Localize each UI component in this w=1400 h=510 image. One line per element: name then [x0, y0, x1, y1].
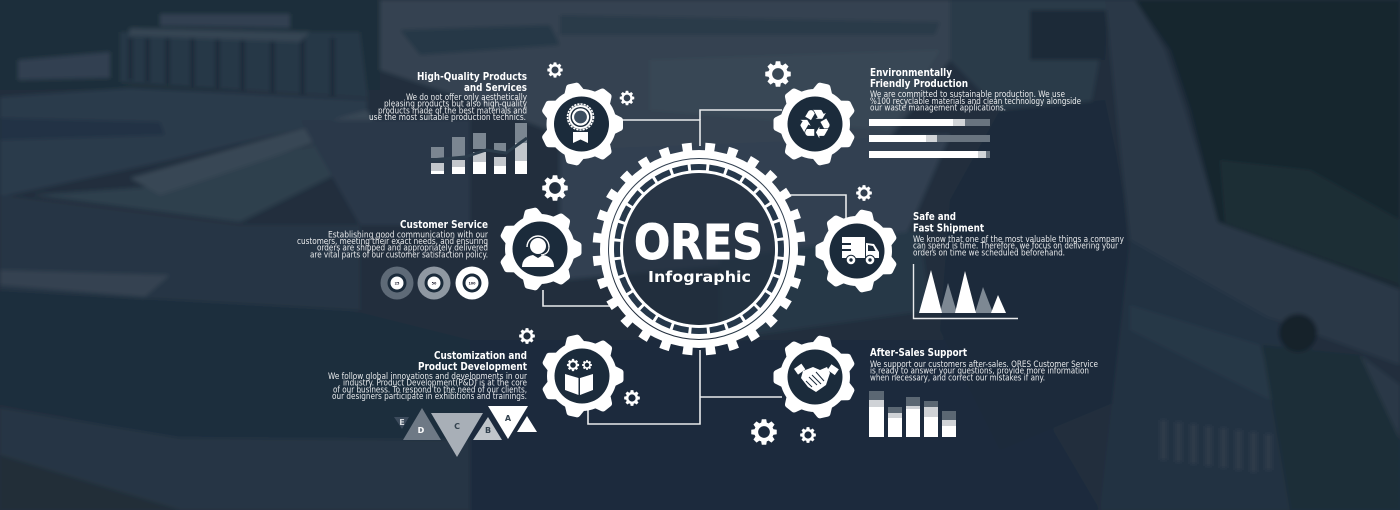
bar chart: quality [431, 123, 527, 174]
gear: recycling [774, 81, 857, 167]
icon: delivery truck [836, 237, 879, 265]
trend line [431, 138, 527, 160]
gear: after-sales handshake [774, 334, 857, 420]
icon: book with gears [565, 359, 593, 395]
body text: We know that one of the most valuable things a company [913, 234, 1124, 244]
triangle chart: A to E: A [505, 414, 512, 423]
heading: Fast Shipment [913, 222, 984, 234]
body text [328, 371, 527, 401]
heading [870, 67, 968, 90]
donut charts: 25, 50, 100 [380, 266, 488, 300]
body text: We support our customers after-sales. ORES Customer Service [870, 359, 1098, 369]
connector lines [543, 110, 846, 424]
icon: recycle symbol: ♻ [797, 102, 833, 148]
mountain chart: shipment [914, 264, 1018, 318]
gear: quality award [539, 81, 623, 167]
body text: pleasing products but also high-quality [384, 99, 527, 109]
body text [297, 230, 488, 259]
body text: We follow global innovations and developments in our [328, 371, 527, 381]
gear: shipment truck [816, 208, 899, 294]
body text: Establishing good communication with our [328, 230, 488, 240]
body text: of our business. To respond to the need of our clients, [333, 384, 527, 394]
heading: After-Sales Support [870, 347, 967, 359]
text block: environmentally friendly [870, 67, 1081, 112]
subtitle: Infographic [648, 268, 751, 286]
body text [870, 89, 1081, 112]
triangle chart: A to E: B [485, 426, 491, 435]
body text: orders are shipped and appropriately delivered [317, 243, 488, 253]
body text: %100 recyclable materials and clean technology alongside [870, 96, 1081, 106]
donut charts: 25, 50, 100: 50 [432, 282, 437, 286]
body text: use the most suitable production technics. [369, 112, 526, 122]
heading: Product Development [418, 361, 527, 373]
triangle chart: A to E: E [399, 418, 405, 427]
gear: customization book [540, 333, 624, 419]
icon: person with headset [522, 236, 554, 267]
triangle chart: A to E [394, 406, 537, 457]
icon: handshake [794, 364, 839, 392]
heading: Environmentally [870, 67, 952, 79]
text block: customer service [297, 219, 488, 259]
heading [417, 71, 527, 94]
heading [913, 211, 984, 234]
donut charts: 25, 50, 100: 100 [468, 282, 476, 286]
decorative small gears [519, 61, 872, 445]
heading [418, 350, 527, 373]
triangle chart: A to E: D [418, 426, 425, 435]
body text: customers, meeting their exact needs, and ensuring [297, 236, 488, 246]
heading: Safe and [913, 211, 956, 223]
body text: industry. Product Development(P&D) is at the core [343, 378, 527, 388]
body text [870, 359, 1098, 382]
body text: can spend is time. Therefore, we focus on delivering your [913, 241, 1118, 251]
heading: High-Quality Products [417, 71, 527, 83]
heading: Friendly Production [870, 78, 968, 90]
heading: Customization and [434, 350, 527, 362]
text block: customization [328, 350, 527, 401]
body text: our designers participate in exhibitions and trainings. [332, 391, 527, 401]
body text: are vital parts of our customer satisfaction policy. [310, 249, 488, 259]
text block: after-sales support [870, 347, 1098, 382]
donut charts: 25, 50, 100: 25 [395, 282, 400, 286]
body text: products made of the best materials and [378, 105, 527, 115]
body text: our waste management applications. [870, 102, 1006, 112]
stacked bar chart: after-sales [869, 391, 956, 437]
title: ORES [634, 215, 763, 271]
heading: and Services [464, 82, 527, 94]
progress bars: environment [869, 119, 990, 158]
gear: customer service headset [498, 206, 582, 292]
text block: safe shipment [913, 211, 1124, 257]
icon: rosette ribbon [568, 104, 594, 143]
heading: Customer Service [400, 219, 488, 231]
body text [913, 234, 1124, 257]
central gear [596, 146, 802, 352]
text block: high-quality products [369, 71, 527, 122]
body text: We are committed to sustainable production. We use [870, 89, 1065, 99]
body text: is ready to answer your questions, provide more information [870, 366, 1089, 376]
body text: orders on time we scheduled beforehand. [913, 247, 1065, 257]
body text [369, 92, 527, 122]
triangle chart: A to E: C [454, 422, 460, 431]
body text: when necessary, and correct our mistakes if any. [870, 372, 1045, 382]
body text: We do not offer only aesthetically [406, 92, 527, 102]
